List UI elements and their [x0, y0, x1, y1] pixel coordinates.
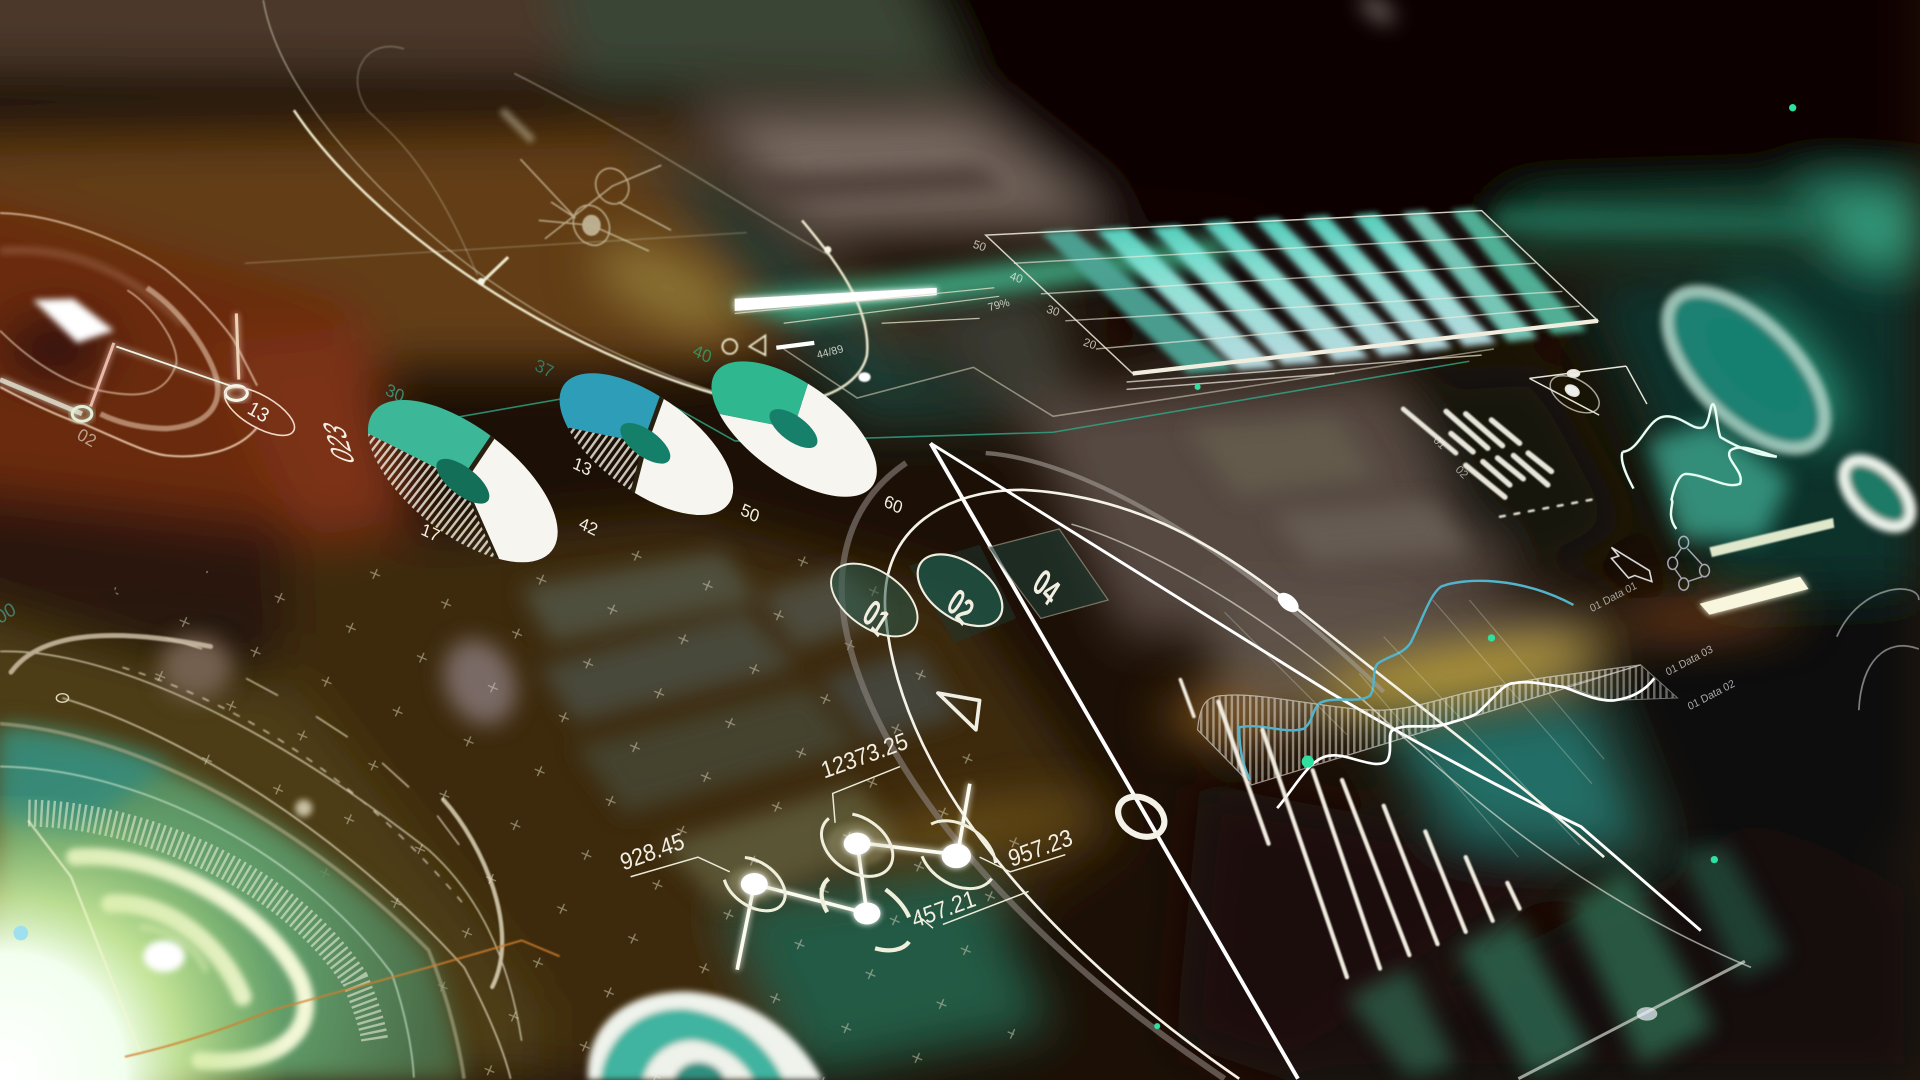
- corner light bloom: [0, 796, 288, 1080]
- value labels: 12373.25: [818, 727, 911, 784]
- descending bars: [1180, 680, 1520, 977]
- callout leaders: [631, 767, 1065, 928]
- green sparkle points: [1154, 104, 1796, 1029]
- white gauge arc: [885, 490, 1604, 1079]
- loop nodes: [722, 339, 737, 354]
- green disc: [0, 724, 464, 1080]
- far right arcs: [1837, 589, 1919, 710]
- axis labels: [971, 238, 1098, 352]
- axis labels: 40: [1008, 270, 1024, 286]
- pie value labels: 42: [577, 513, 600, 540]
- label 02: 02: [74, 424, 100, 451]
- needle ring: [1111, 789, 1172, 845]
- numbered badges: [818, 529, 1108, 651]
- small value label: 44/89: [815, 343, 845, 362]
- value labels: 928.45: [617, 827, 687, 876]
- pie value labels: 13: [571, 453, 594, 480]
- value labels: [617, 727, 1076, 933]
- bright stripe: [735, 288, 937, 311]
- line chart panel: 01 Data 01: [1588, 580, 1639, 615]
- grey upper arc: [986, 453, 1384, 692]
- radial gauge bottom-left: [0, 599, 560, 1080]
- network nodes: [502, 110, 671, 252]
- badge 01: 01: [856, 592, 895, 645]
- pie value labels: 40: [691, 340, 714, 367]
- links: [737, 784, 970, 970]
- node cores: [741, 833, 971, 924]
- node and label 13: 13: [244, 397, 273, 428]
- dot-bar labels: 01: [1431, 434, 1448, 452]
- needle: [931, 443, 1298, 1079]
- rotating node: [56, 694, 69, 702]
- value point network: [617, 727, 1076, 970]
- wave chart: [1622, 404, 1790, 539]
- legend text: 01 Data 03: [1664, 643, 1715, 679]
- molecule icon: [1668, 536, 1709, 590]
- axis labels: 30: [1045, 303, 1061, 319]
- value labels: 457.21: [908, 884, 979, 933]
- bright marker: [33, 299, 114, 343]
- line chart panel: [1180, 580, 1737, 977]
- plus-mark grid: [110, 539, 1053, 1080]
- white bars: [1709, 518, 1834, 557]
- pentagon arrow icon: [1611, 547, 1652, 582]
- right side widgets: [1403, 264, 1920, 710]
- badge 01: [818, 549, 931, 651]
- node halos: [727, 823, 889, 902]
- big upper loop: [294, 110, 867, 404]
- pie value labels: 37: [533, 355, 556, 382]
- pie value labels: 023: [316, 418, 363, 468]
- short dash: [776, 343, 814, 348]
- network links: [0, 313, 239, 414]
- value labels: 957.23: [1005, 823, 1076, 872]
- dot-bar chart: [1403, 409, 1592, 517]
- small percent label: 79%: [987, 297, 1012, 314]
- radar rings top-left: [0, 213, 301, 456]
- thin orbital arcs and network: [245, 0, 871, 404]
- gauge core: [143, 940, 185, 972]
- node rings: [714, 800, 1009, 966]
- lens flare streaks: [1224, 600, 1745, 1079]
- node and label 13: [218, 378, 301, 445]
- scope icon: [1529, 366, 1647, 420]
- hatched ring: [28, 813, 375, 1041]
- pie chart 2: [536, 346, 756, 542]
- triangle icon: [938, 693, 980, 730]
- grey outer arc: [842, 463, 1224, 1079]
- badge 04: 04: [1027, 562, 1065, 614]
- pie value labels: 17: [419, 519, 442, 546]
- thin stripe lines: [735, 288, 999, 323]
- chart frame: [986, 211, 1598, 389]
- badge 04: [988, 529, 1108, 618]
- axis labels: 50: [971, 238, 988, 254]
- thin and thick rings: [0, 213, 257, 456]
- dot-bar labels: 02: [1453, 464, 1470, 481]
- blue line: [1239, 581, 1573, 780]
- pie value labels: 60: [882, 491, 905, 518]
- small donut bottom: [588, 992, 823, 1080]
- right hatched wedge: [1564, 665, 1678, 700]
- line chart panel: 01 Data 02: [1686, 678, 1737, 713]
- bar chart panel: [971, 208, 1598, 389]
- pie chart 3: [689, 335, 899, 523]
- blue lens dot: [13, 926, 28, 940]
- hatched area: [1198, 665, 1641, 785]
- data-flow gauge with needle: [842, 443, 1751, 1079]
- bars: [1041, 208, 1587, 373]
- bright rings: [75, 857, 306, 1061]
- teal blurred ring: [1831, 448, 1920, 539]
- arc marker: [1274, 589, 1302, 616]
- pie chart 1: [341, 370, 584, 593]
- pie value labels: 50: [738, 499, 762, 527]
- white wave: [1277, 678, 1654, 808]
- axis labels: 20: [1082, 336, 1098, 352]
- thin rings: [0, 636, 522, 1079]
- connector lines: [392, 349, 1494, 447]
- badge 02: [905, 540, 1016, 643]
- teal disc edge: [0, 731, 171, 833]
- pie value labels: [316, 340, 905, 546]
- bright speck: [295, 800, 312, 817]
- dot-bar labels: [1431, 434, 1470, 481]
- orange trace line: [125, 940, 560, 1057]
- badge 02: 02: [941, 581, 979, 634]
- status bars: [735, 288, 1012, 362]
- pie value labels: 30: [383, 379, 407, 407]
- node 02: [72, 407, 92, 421]
- ring gauge: [1640, 264, 1852, 475]
